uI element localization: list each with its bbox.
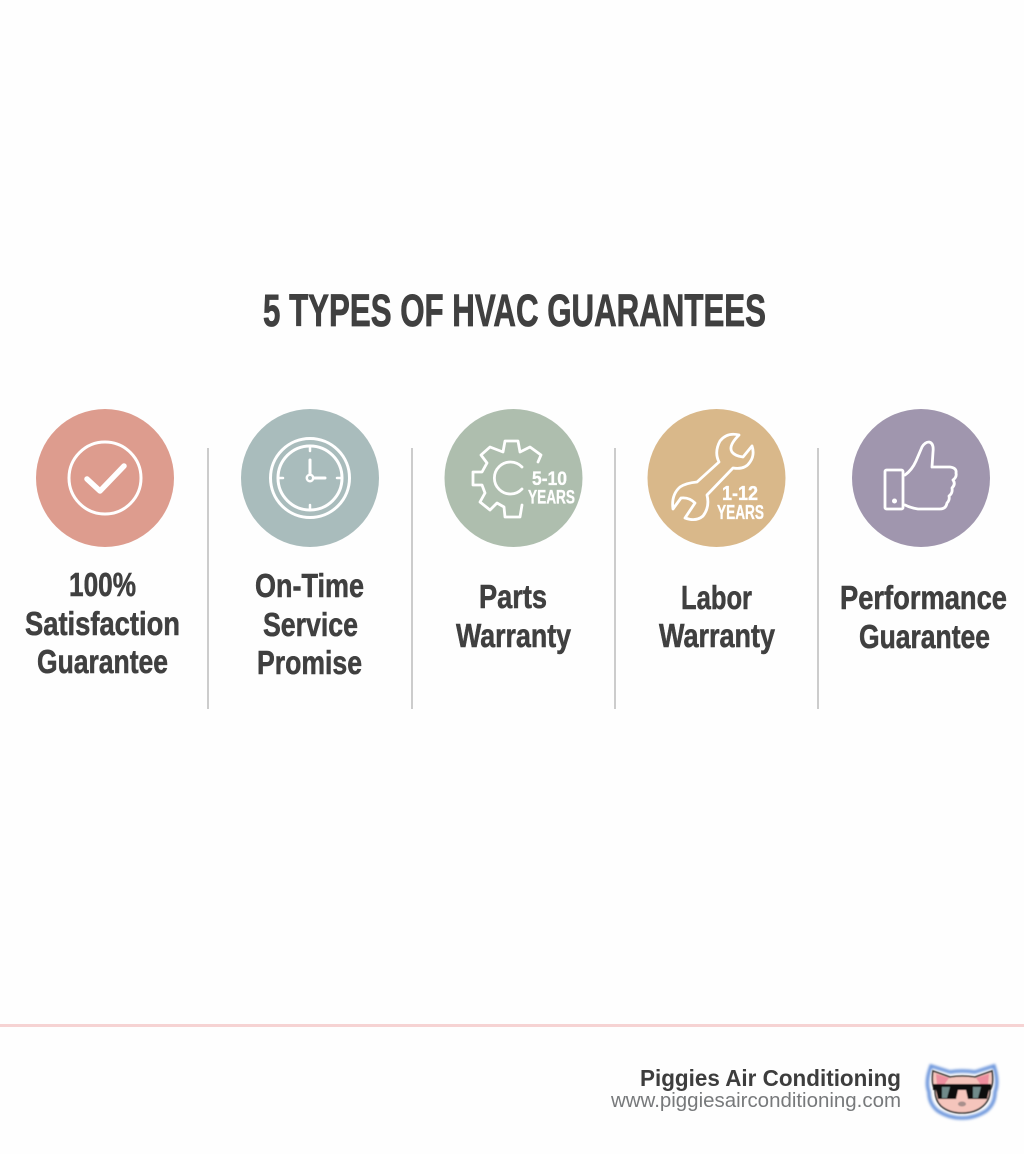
icon: wrench with 1-12 years: 1-12 xyxy=(722,482,758,505)
icon: gear with 5-10 years: 5-10 xyxy=(532,468,567,490)
panel: on-time service promise xyxy=(241,409,379,681)
label: On-Time Service Promise: On-Time xyxy=(255,567,364,604)
label: 100% Satisfaction Guarantee: Guarantee xyxy=(37,643,168,680)
footer brand text xyxy=(610,1065,901,1112)
label: Parts Warranty: Warranty xyxy=(456,617,572,654)
panel: performance guarantee xyxy=(840,409,1007,655)
icon: check mark in circle xyxy=(36,409,174,547)
label: Labor Warranty: Warranty xyxy=(659,617,776,654)
icon: wrench with 1-12 years: YEARS xyxy=(717,501,764,524)
panel: 100% satisfaction guarantee xyxy=(25,409,180,680)
label: Labor Warranty: Labor xyxy=(681,579,752,616)
label: 100% Satisfaction Guarantee: Satisfaction xyxy=(25,605,180,642)
footer brand text: www.piggiesairconditioning.com xyxy=(610,1090,901,1112)
label: Parts Warranty xyxy=(456,578,572,654)
icon: wrench with 1-12 years xyxy=(648,409,786,547)
label: Performance Guarantee xyxy=(840,579,1007,655)
icon: gear with 5-10 years xyxy=(444,409,582,547)
footer brand text: Piggies Air Conditioning xyxy=(640,1065,901,1091)
icon: clock xyxy=(241,409,379,547)
panel: labor warranty xyxy=(648,409,786,654)
label: On-Time Service Promise: Service xyxy=(263,606,358,643)
label: Labor Warranty xyxy=(659,579,776,654)
label: Performance Guarantee: Guarantee xyxy=(859,618,990,655)
icon: gear with 5-10 years: YEARS xyxy=(528,486,575,508)
label: 100% Satisfaction Guarantee: 100% xyxy=(69,566,136,603)
label: On-Time Service Promise xyxy=(255,567,364,681)
icon: thumbs up xyxy=(852,409,990,547)
label: On-Time Service Promise: Promise xyxy=(257,644,362,681)
title: 5 TYPES OF HVAC GUARANTEES xyxy=(263,285,766,336)
panel: parts warranty xyxy=(444,409,582,654)
label: 100% Satisfaction Guarantee xyxy=(25,566,180,680)
icon: pig logo with sunglasses xyxy=(927,1066,997,1118)
label: Parts Warranty: Parts xyxy=(479,578,547,615)
